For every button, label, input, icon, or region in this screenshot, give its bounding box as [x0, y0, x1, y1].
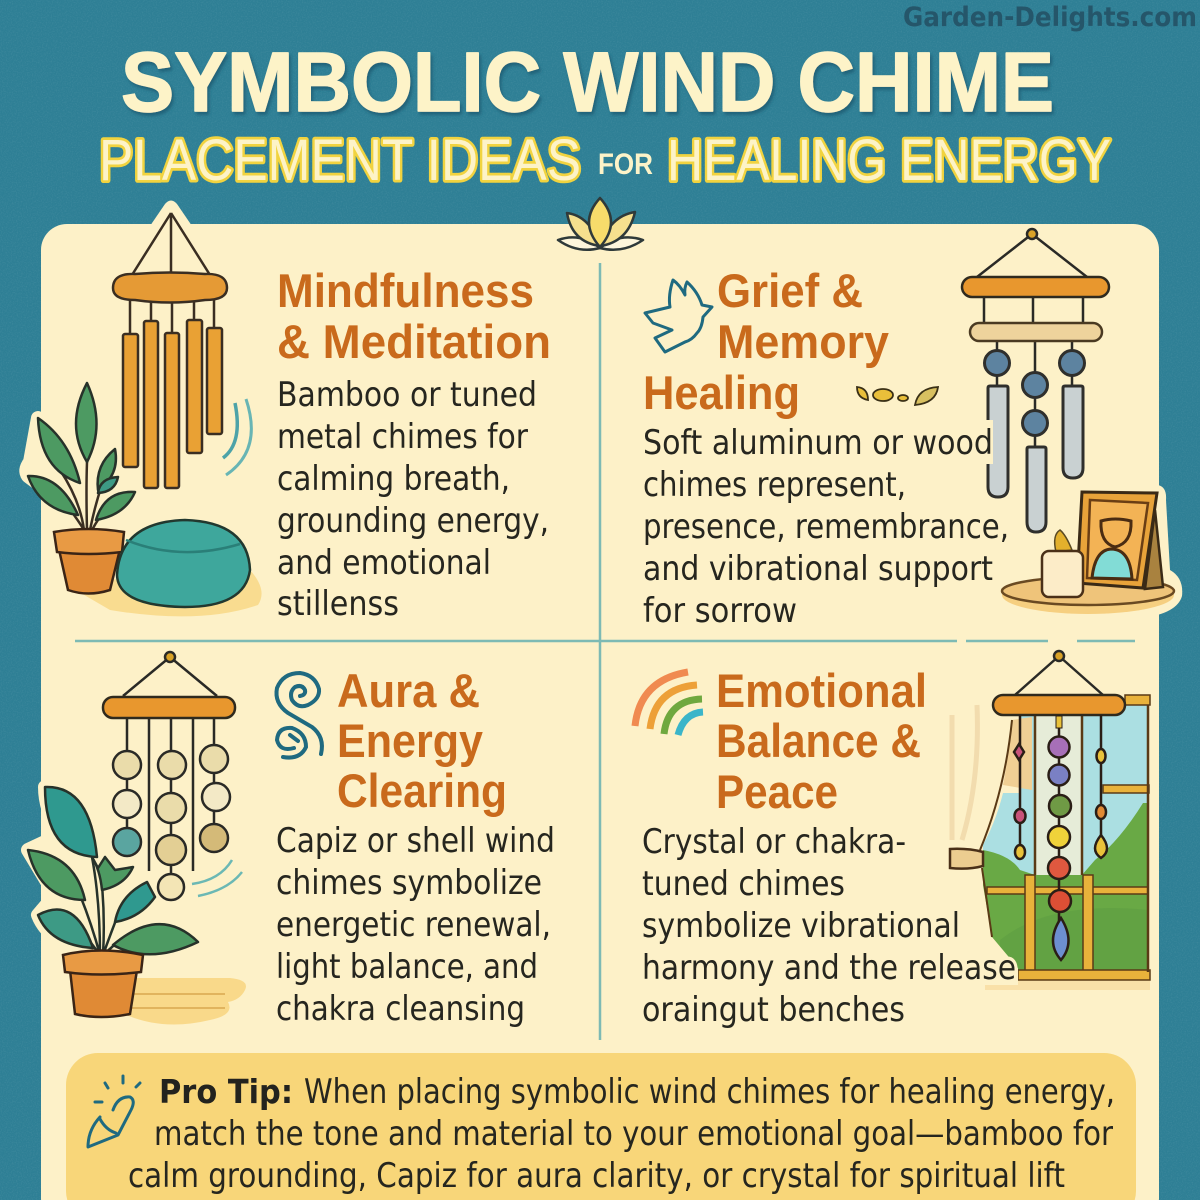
icon: spiral — [276, 673, 322, 758]
icon: leaves — [857, 387, 938, 405]
body text: symbolize vibrational — [642, 906, 960, 946]
illustration: aluminum chime with frame and candle — [962, 229, 1182, 620]
illustration: crystal chime at window — [950, 651, 1150, 990]
body text: tuned chimes — [642, 864, 845, 904]
subtitle: FOR — [598, 148, 653, 181]
body text: chimes symbolize — [276, 863, 542, 903]
body text: and emotional — [277, 543, 491, 583]
dividers — [75, 263, 1135, 1040]
panel: pro tip — [66, 1053, 1136, 1200]
body text: oraingut benches — [642, 990, 905, 1030]
body text: Capiz or shell wind — [276, 821, 555, 861]
body text: and vibrational support — [643, 549, 993, 589]
panel: mindfulness and meditation — [26, 200, 551, 624]
icon: rainbow — [635, 672, 703, 735]
cushion — [117, 520, 250, 607]
body text: metal chimes for — [277, 417, 528, 457]
body text: calming breath, — [277, 459, 510, 499]
panel: aura and energy clearing: Energy — [337, 714, 483, 767]
subtitle: PLACEMENT IDEAS — [99, 128, 581, 193]
panel: emotional balance and peace — [635, 651, 1150, 1030]
heading: Mindfulness — [277, 264, 534, 317]
panel: grief and memory healing: Memory — [717, 315, 889, 368]
icon: dove — [645, 280, 712, 352]
panel: emotional balance and peace: Balance & — [716, 714, 921, 767]
body text: harmony and the release — [642, 948, 1016, 988]
illustration: bamboo chime with plant and cushion — [26, 200, 262, 616]
body text — [642, 822, 1016, 1030]
body text: chimes represent, — [643, 465, 906, 505]
body text: for sorrow — [643, 591, 797, 631]
curtain — [960, 680, 1020, 985]
tip text: Pro Tip: — [159, 1072, 293, 1111]
heading: Emotional — [716, 664, 927, 717]
body text: Soft aluminum or wood — [643, 423, 993, 463]
heading: Grief & — [717, 264, 863, 317]
chime — [1015, 656, 1103, 695]
panel: mindfulness and meditation: & Meditation — [277, 315, 551, 368]
body text: light balance, and — [276, 947, 538, 987]
body text: stillenss — [277, 584, 399, 624]
body text: Crystal or chakra- — [642, 822, 906, 862]
body text — [643, 423, 1009, 631]
body text: Bamboo or tuned — [277, 375, 537, 415]
icon: lotus — [558, 198, 643, 250]
illustration: capiz chime and plant — [28, 652, 246, 1024]
heading: Aura & — [337, 664, 480, 717]
body text: presence, remembrance, — [643, 507, 1009, 547]
body text: energetic renewal, — [276, 905, 551, 945]
icon: lightbulb pencil — [88, 1076, 140, 1147]
tip background — [66, 1053, 1136, 1200]
panel: grief and memory healing: Healing — [643, 366, 800, 419]
body text: grounding energy, — [277, 501, 549, 541]
panel: aura and energy clearing — [28, 652, 555, 1029]
subtitle — [99, 128, 1111, 193]
main panel — [41, 224, 1159, 1200]
panel: grief and memory healing — [643, 229, 1182, 631]
body text — [276, 821, 555, 1029]
panel: pro tip: calm grounding, Capiz for aura clarity, or crystal for spiritual lift — [128, 1156, 1065, 1196]
title: SYMBOLIC WIND CHIME — [121, 35, 1054, 129]
body text: chakra cleansing — [276, 989, 525, 1029]
plant — [26, 418, 80, 500]
subtitle: HEALING ENERGY — [667, 128, 1111, 193]
panel: emotional balance and peace: Peace — [716, 765, 838, 818]
plant — [28, 786, 95, 948]
body text — [277, 375, 549, 624]
panel: aura and energy clearing: Clearing — [337, 764, 507, 817]
